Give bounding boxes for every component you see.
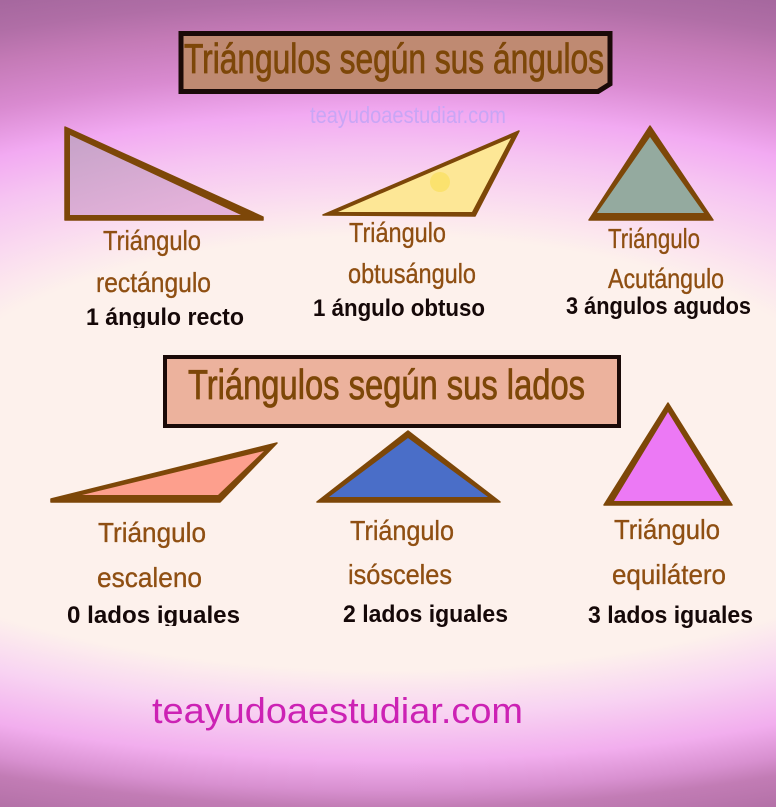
footer website: teayudoaestudiar.com <box>152 690 523 731</box>
icon: equilateral triangle <box>604 403 732 505</box>
icon: scalene triangle <box>51 443 277 502</box>
label: escaleno: escaleno <box>97 562 202 593</box>
watermark: teayudoaestudiar.com <box>310 102 506 128</box>
label: escaleno: Triángulo <box>98 517 206 548</box>
label: escaleno <box>97 517 206 593</box>
icon: right triangle <box>65 127 263 220</box>
label: Acutángulo: Triángulo <box>608 223 700 254</box>
label: isósceles <box>348 515 454 590</box>
label: isósceles: Triángulo <box>350 515 454 546</box>
panel: acute triangle <box>566 126 751 320</box>
label: equilátero: equilátero <box>612 559 726 590</box>
panel: right triangle <box>65 127 263 336</box>
label: obtusángulo: Triángulo <box>349 217 446 248</box>
panel: isosceles triangle <box>317 431 508 628</box>
heading: triangles by angles <box>181 34 610 92</box>
note: 1 ángulo obtuso: 1 ángulo obtuso <box>313 295 485 322</box>
panel: equilateral triangle <box>588 403 753 629</box>
icon: acute triangle <box>589 126 713 220</box>
note: 0 lados iguales: 0 lados iguales <box>67 602 240 629</box>
note: 3 ángulos agudos: 3 ángulos agudos <box>566 293 751 320</box>
label: rectángulo: rectángulo <box>96 267 211 298</box>
icon: obtuse triangle <box>323 131 519 216</box>
label: equilátero: Triángulo <box>614 514 720 545</box>
label: obtusángulo: obtusángulo <box>348 258 476 289</box>
label: rectángulo: Triángulo <box>103 225 201 256</box>
label: isósceles: isósceles <box>348 559 452 590</box>
icon: isosceles triangle <box>317 431 500 502</box>
heading: triangles by angles: Triángulos según sus ángulos <box>184 35 604 82</box>
note: 1 ángulo recto: 1 ángulo recto <box>86 304 244 331</box>
heading: triangles by sides: Triángulos según sus lados <box>188 361 585 408</box>
label: rectángulo <box>96 225 211 298</box>
label: equilátero <box>612 514 726 590</box>
note: 3 lados iguales: 3 lados iguales <box>588 602 753 629</box>
label: obtusángulo <box>348 217 476 289</box>
label: Acutángulo: Acutángulo <box>608 263 724 294</box>
note: 2 lados iguales: 2 lados iguales <box>343 601 508 628</box>
heading: triangles by sides <box>165 357 619 426</box>
label: Acutángulo <box>608 223 724 294</box>
panel: obtuse triangle <box>313 131 519 322</box>
panel: scalene triangle <box>51 443 277 634</box>
